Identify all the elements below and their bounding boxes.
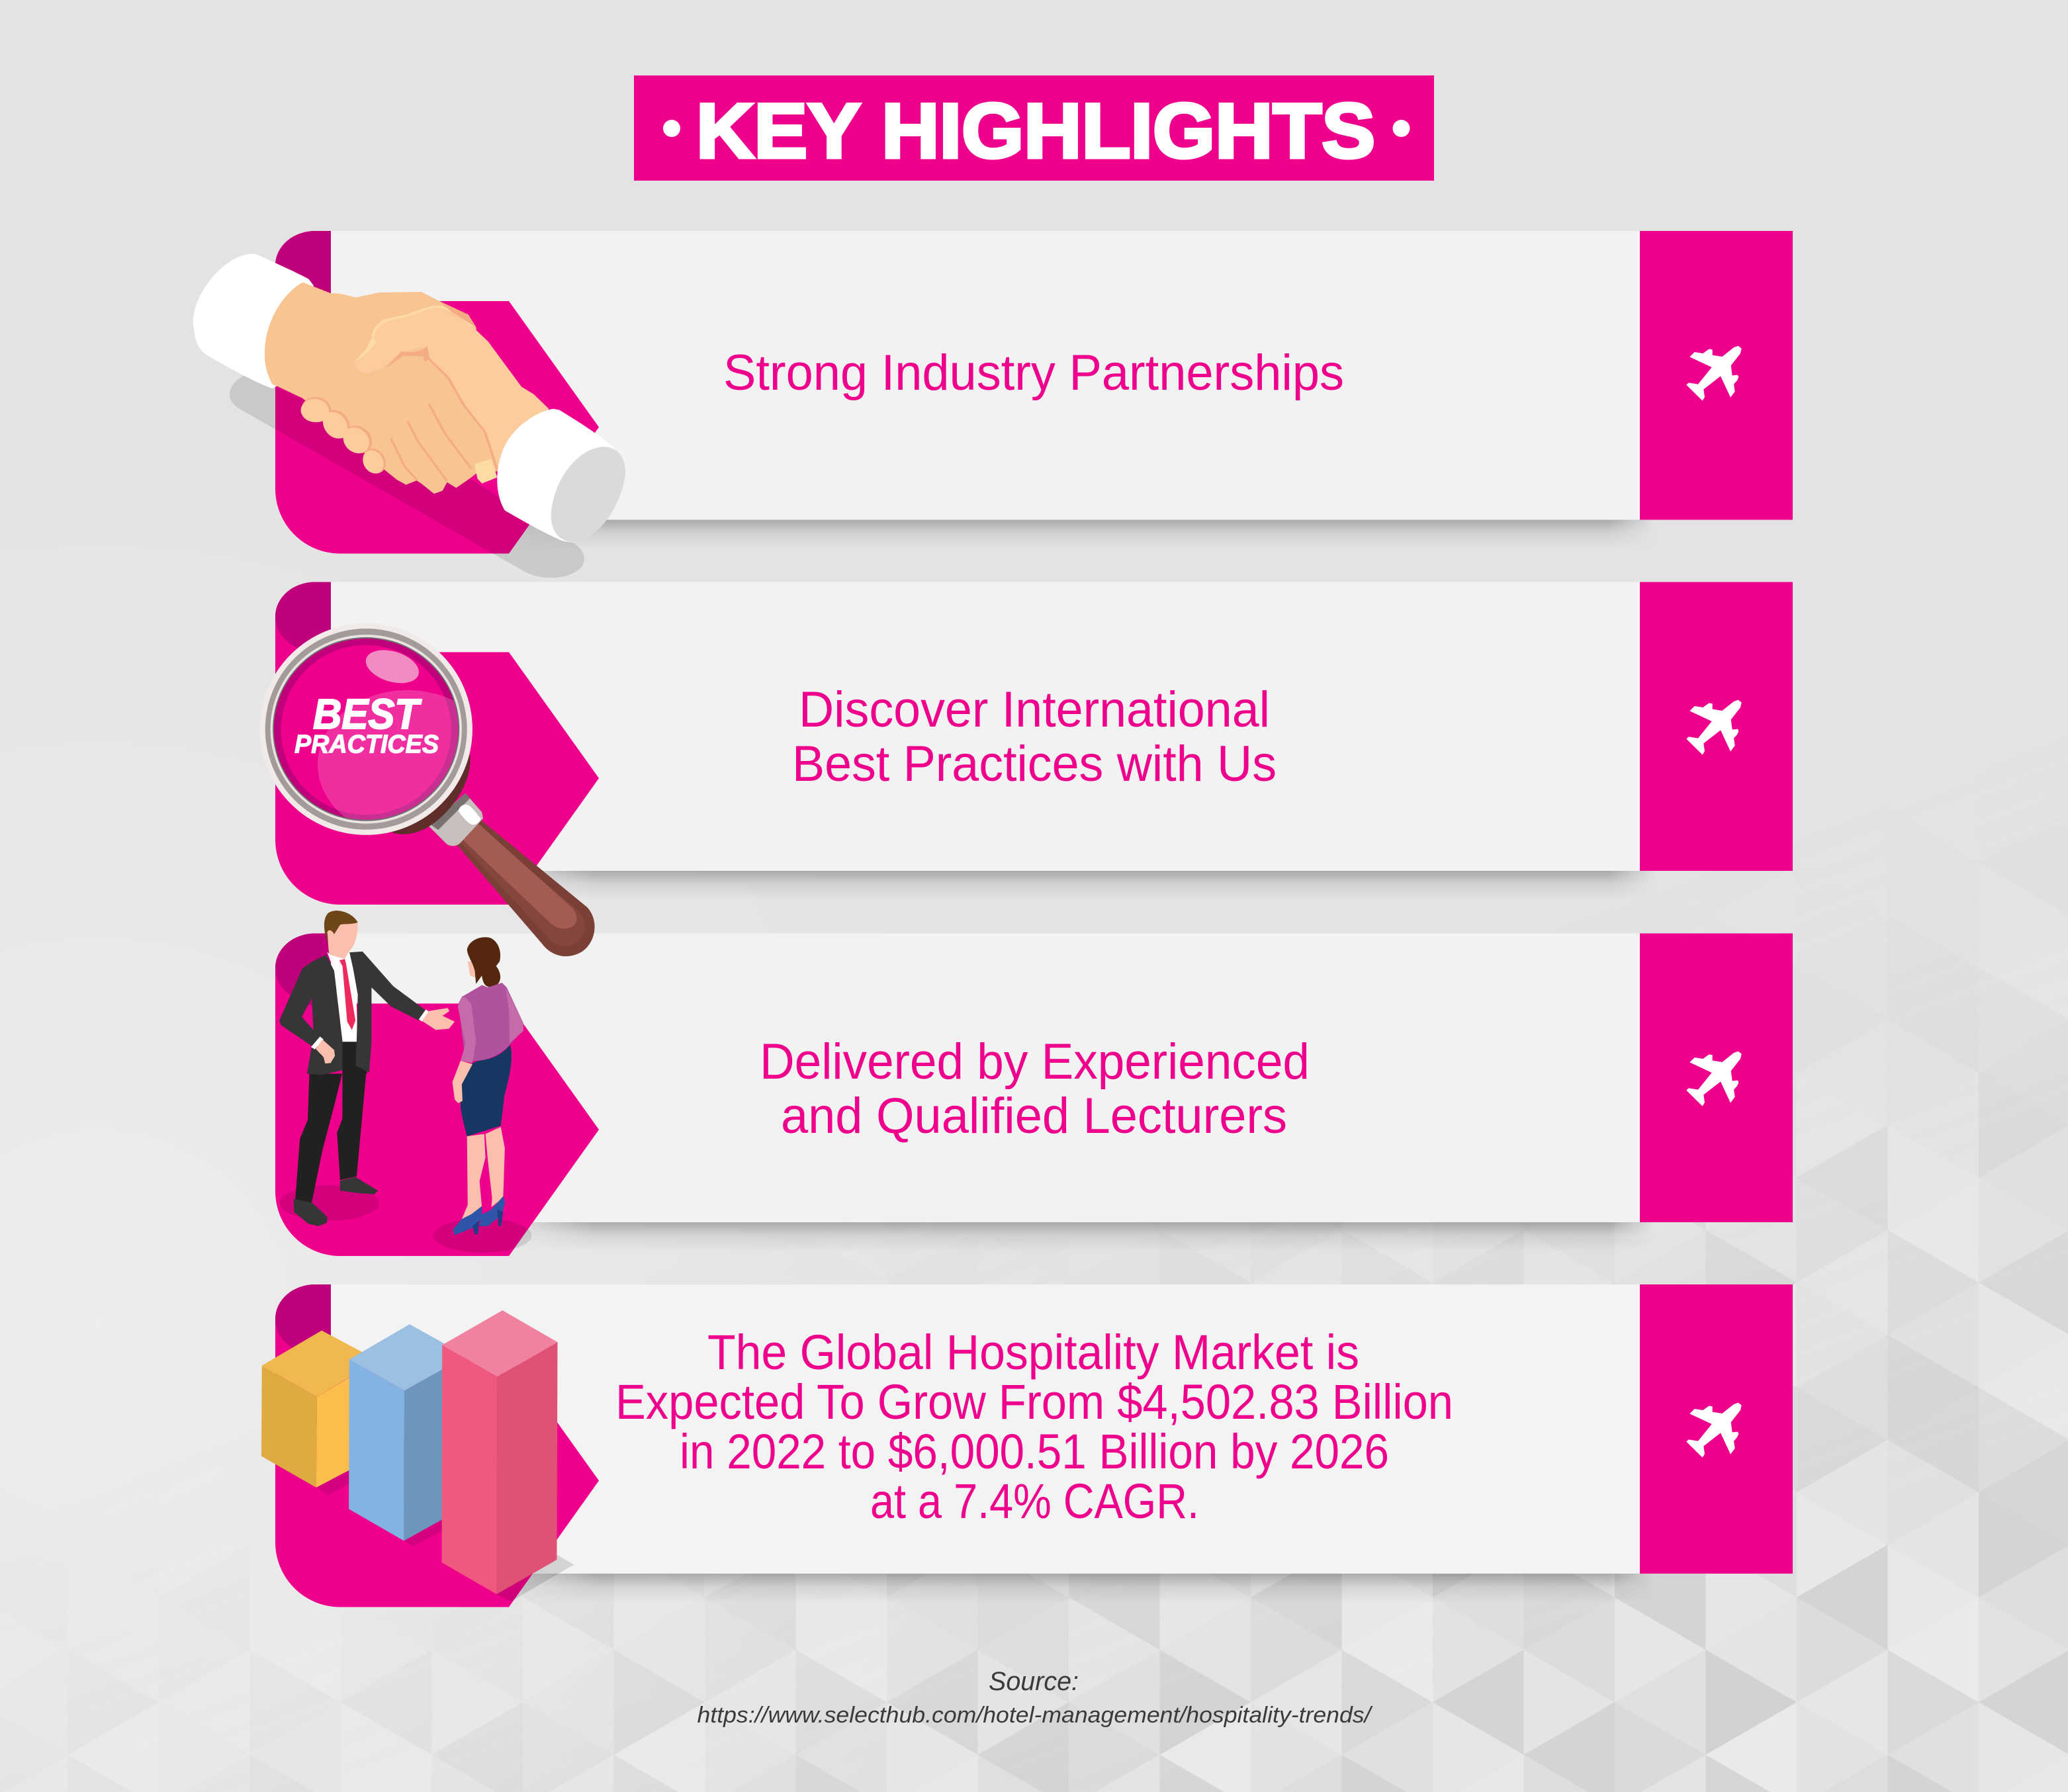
bar: pink [441, 1310, 574, 1601]
text block: Expected To Grow From $4,502.83 Billion [615, 1374, 1453, 1429]
man [279, 911, 455, 1226]
text block [792, 682, 1277, 792]
illustration: business man and woman [279, 911, 532, 1253]
icon: plane [1686, 346, 1742, 401]
text block: Discover International [799, 682, 1270, 738]
bar: yellow [261, 1331, 377, 1495]
text block: The Global Hospitality Market is [707, 1325, 1359, 1380]
icon: magnifying glass with best practices [259, 623, 595, 956]
icon: plane [1686, 700, 1742, 755]
background: low-poly triangle pattern [0, 1088, 2068, 1792]
icon: magnifying glass with best practices: PRACTICES [294, 731, 439, 758]
chart: isometric bars [261, 1310, 574, 1601]
source note [697, 1667, 1373, 1728]
text block: Delivered by Experienced [760, 1034, 1310, 1090]
text block: Best Practices with Us [792, 736, 1277, 792]
panel: row 4 market growth [275, 1284, 1793, 1607]
bar: blue [349, 1324, 446, 1546]
text block [760, 1034, 1310, 1144]
icon: handshake [193, 254, 625, 578]
source note: https://www.selecthub.com/hotel-management/hospitality-trends/ [697, 1703, 1373, 1728]
icon: plane [1686, 1052, 1742, 1106]
text block [615, 1325, 1453, 1529]
title banner: KEY HIGHLIGHTS [696, 87, 1375, 174]
text block: and Qualified Lecturers [781, 1088, 1287, 1144]
panel: row 3 experienced lecturers [275, 933, 1793, 1256]
panel: row 1 strong industry partnerships [275, 231, 1793, 553]
icon: plane [1686, 1403, 1742, 1458]
text block: in 2022 to $6,000.51 Billion by 2026 [680, 1424, 1389, 1479]
panel: row 2 international best practices [275, 582, 1793, 905]
woman [433, 937, 532, 1253]
source note: Source: [989, 1667, 1079, 1696]
text block: at a 7.4% CAGR. [870, 1474, 1199, 1529]
title banner [634, 75, 1434, 181]
text block: Strong Industry Partnerships [723, 345, 1344, 401]
icon: magnifying glass with best practices: BEST [313, 690, 422, 738]
